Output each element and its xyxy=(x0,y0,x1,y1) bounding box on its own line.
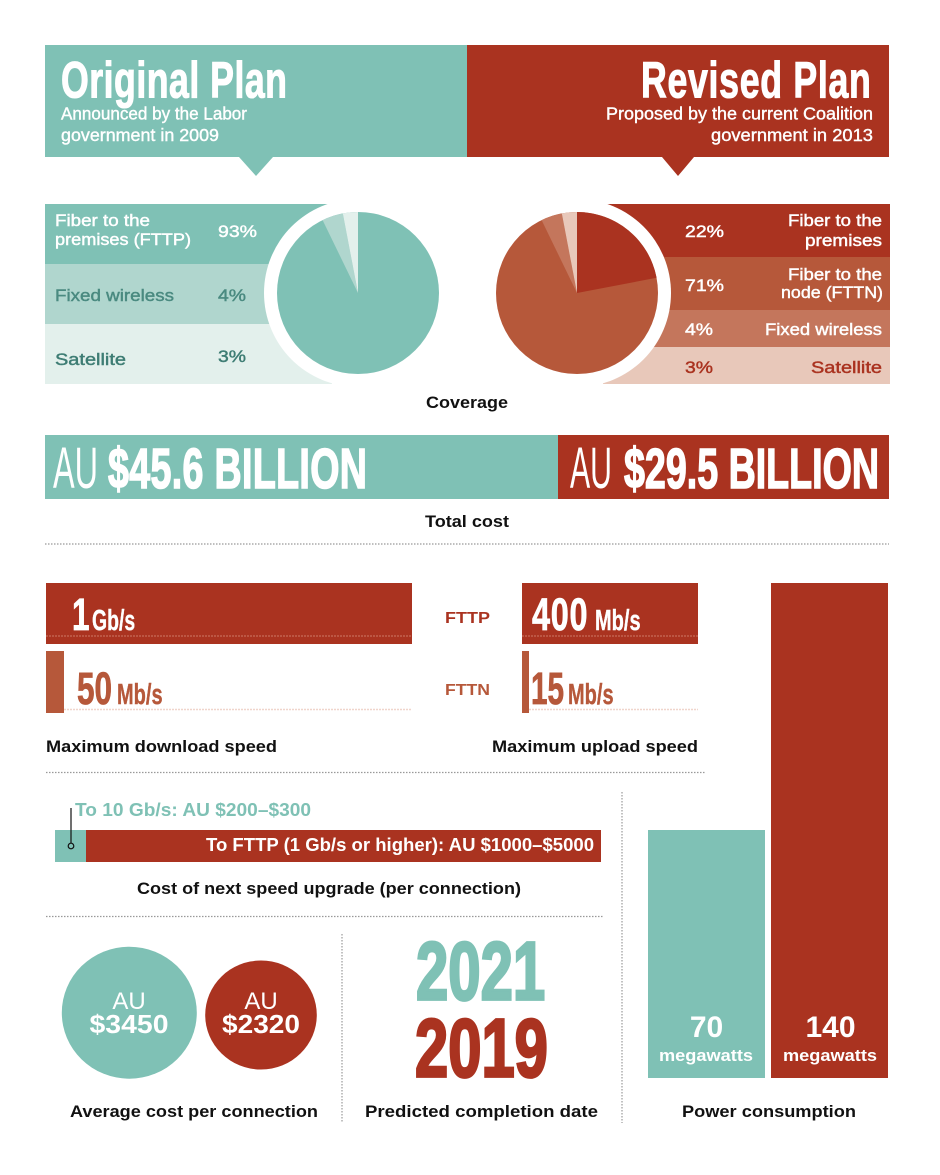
legend row: fiber to the premises: 22% xyxy=(685,222,724,241)
caption: total cost: Total cost xyxy=(425,512,509,531)
caption: maximum download speed: Maximum download speed xyxy=(46,737,277,756)
caption: cost of next speed upgrade: Cost of next speed upgrade (per connection) xyxy=(137,879,521,898)
legend row: fiber to the premises: Fiber to the xyxy=(55,211,150,230)
caption: average cost per connection: Average cost per connection xyxy=(70,1102,318,1121)
legend row: satellite xyxy=(685,358,882,377)
label: FTTN: FTTN xyxy=(445,682,490,699)
heading: original plan: Original Plan xyxy=(61,52,287,109)
pie chart: revised plan coverage xyxy=(496,212,658,374)
value: upload FTTN: 15 xyxy=(531,664,564,715)
text: revised plan description: government in 2013 xyxy=(711,125,873,145)
legend row: fiber to the premises xyxy=(55,211,257,249)
legend row: fixed wireless: 4% xyxy=(218,286,246,305)
legend row: satellite: Satellite xyxy=(55,350,126,369)
value: upload FTTP: Mb/s xyxy=(595,604,641,637)
text: revised plan description xyxy=(606,104,873,145)
circle: original average cost: $3450 xyxy=(90,1009,168,1039)
legend row: fiber to the premises xyxy=(685,211,882,250)
legend row: satellite: 3% xyxy=(685,358,713,377)
bar: original total cost: AU xyxy=(53,436,98,501)
bar: original total cost: $45.6 BILLION xyxy=(108,437,367,501)
bar: original power consumption xyxy=(648,830,765,1078)
legend row: fiber to the node: 71% xyxy=(685,276,724,295)
circle: original average cost: AU xyxy=(112,988,146,1015)
legend row: fiber to the node: node (FTTN) xyxy=(781,283,883,302)
legend row: satellite: 3% xyxy=(218,347,246,366)
value: upload FTTN: Mb/s xyxy=(568,678,614,711)
circle: revised average cost: $2320 xyxy=(222,1009,300,1039)
label: FTTP: FTTP xyxy=(445,610,490,627)
label: to FTTP: To FTTP (1 Gb/s or higher): AU $1000–$5000 xyxy=(206,835,594,855)
chart: maximum upload speed xyxy=(522,583,698,715)
value: download FTTN: 50 xyxy=(77,665,112,714)
value: download FTTN xyxy=(77,665,163,714)
bar: revised power consumption xyxy=(771,583,888,1078)
legend row: fiber to the premises: Fiber to the xyxy=(788,211,882,230)
caption: predicted completion date: Predicted completion date xyxy=(365,1102,598,1121)
bar: revised power consumption: megawatts xyxy=(783,1046,877,1065)
value: download FTTN: Mb/s xyxy=(117,678,163,711)
circle: revised average cost: AU xyxy=(244,988,278,1015)
value: download FTTP: Gb/s xyxy=(92,605,135,637)
legend row: fiber to the node: Fiber to the xyxy=(788,265,882,284)
legend row: fiber to the premises: premises (FTTP) xyxy=(55,230,191,249)
pointer xyxy=(68,808,74,849)
text: original plan description: government in 2009 xyxy=(61,125,219,145)
circle: revised average cost xyxy=(205,960,317,1070)
legend row: satellite xyxy=(55,347,246,369)
value: download FTTP xyxy=(72,591,135,640)
legend row: satellite: Satellite xyxy=(811,358,882,377)
bar: revised power consumption: 140 xyxy=(805,1011,856,1044)
value: upload FTTP xyxy=(532,591,641,640)
value: upload FTTP: 400 xyxy=(532,591,588,640)
caption: power consumption: Power consumption xyxy=(682,1102,856,1121)
pie chart: original plan coverage xyxy=(277,212,439,374)
caption: coverage: Coverage xyxy=(426,393,508,412)
date: revised completion: 2019 xyxy=(415,1003,548,1095)
date: original completion: 2021 xyxy=(416,925,545,1018)
legend row: fixed wireless xyxy=(685,320,882,339)
legend row: fiber to the node xyxy=(685,265,883,302)
text: original plan description: Announced by the Labor xyxy=(61,104,247,124)
value: upload FTTN xyxy=(531,664,614,715)
legend row: fiber to the premises: 93% xyxy=(218,222,257,241)
value: download FTTP: 1 xyxy=(72,591,90,640)
bar: original total cost xyxy=(45,435,558,501)
legend row: fixed wireless: 4% xyxy=(685,320,713,339)
heading: revised plan: Revised Plan xyxy=(641,52,872,109)
panel: original plan coverage xyxy=(45,199,452,387)
panel: revised plan header xyxy=(467,45,889,176)
legend row: fixed wireless xyxy=(55,286,246,305)
panel: original plan header xyxy=(45,45,467,176)
bar: revised total cost: AU xyxy=(570,436,612,501)
text: revised plan description: Proposed by the current Coalition xyxy=(606,104,873,124)
panel: revised plan coverage xyxy=(483,199,890,387)
text: original plan description xyxy=(61,104,247,145)
bar: revised total cost: $29.5 BILLION xyxy=(624,437,879,501)
circle: original average cost xyxy=(62,947,197,1079)
chart: maximum download speed xyxy=(46,583,412,714)
legend row: fiber to the premises: premises xyxy=(805,231,882,250)
bar: original power consumption: megawatts xyxy=(659,1046,753,1065)
legend row: fixed wireless: Fixed wireless xyxy=(55,286,174,305)
bar: original power consumption: 70 xyxy=(690,1011,723,1044)
caption: maximum upload speed: Maximum upload speed xyxy=(492,737,698,756)
chart: cost of next speed upgrade xyxy=(55,800,601,862)
legend row: fixed wireless: Fixed wireless xyxy=(765,320,882,339)
label: to 10 Gb/s: To 10 Gb/s: AU $200–$300 xyxy=(75,800,311,820)
